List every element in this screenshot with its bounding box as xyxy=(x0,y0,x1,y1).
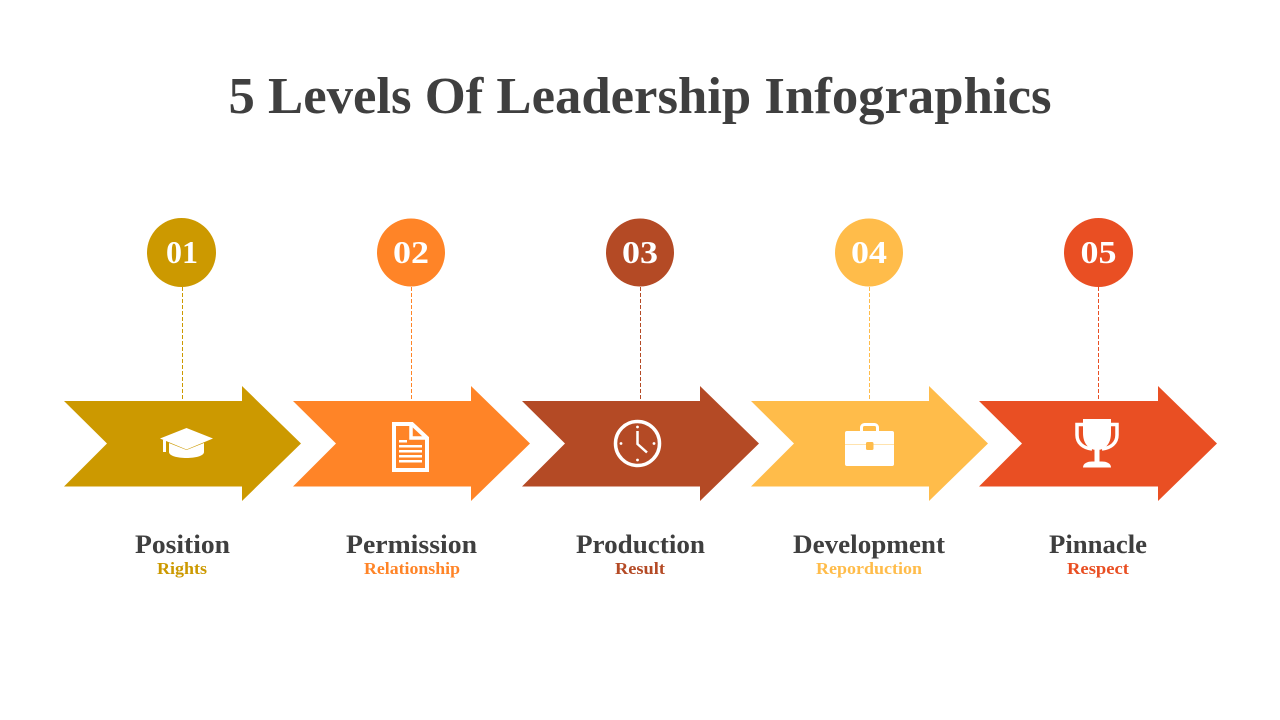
connector line 5 xyxy=(1098,287,1100,401)
sublabel: Result: Result xyxy=(615,559,665,578)
arrow 3 xyxy=(522,386,759,501)
icon: document xyxy=(394,423,427,470)
level 2: Permission xyxy=(293,218,530,578)
number badge 05 xyxy=(1064,218,1133,287)
arrow 2 xyxy=(293,386,530,501)
connector line 1 xyxy=(182,287,184,401)
title: 5 Levels Of Leadership Infographics xyxy=(228,68,1052,125)
number badge 04: 04 xyxy=(851,234,887,270)
arrow 1 xyxy=(64,386,301,501)
icon: briefcase xyxy=(845,424,894,466)
label: Permission: Permission xyxy=(346,530,478,559)
sublabel: Relationship: Relationship xyxy=(364,559,460,578)
number badge 01: 01 xyxy=(166,234,198,270)
number badge 03: 03 xyxy=(622,234,658,270)
label: Pinnacle: Pinnacle xyxy=(1049,530,1147,559)
number badge 02: 02 xyxy=(393,234,429,270)
level 4: Development xyxy=(751,218,988,578)
sublabel: Respect: Respect xyxy=(1067,559,1129,578)
label: Production: Production xyxy=(576,530,706,559)
arrow 5 xyxy=(979,386,1217,501)
icon: clock xyxy=(616,422,660,466)
label: Development: Development xyxy=(793,530,945,559)
number badge 05: 05 xyxy=(1080,234,1116,270)
icon: graduation cap xyxy=(160,428,213,458)
level 1: Position xyxy=(64,218,301,578)
number badge 04 xyxy=(835,218,903,286)
number badge 01 xyxy=(147,218,216,287)
connector line 3 xyxy=(640,287,642,401)
number badge 03 xyxy=(606,218,674,286)
connector line 4 xyxy=(868,287,870,401)
icon: trophy xyxy=(1077,419,1117,468)
level 3: Production xyxy=(522,218,759,578)
number badge 02 xyxy=(377,218,445,286)
sublabel: Rights: Rights xyxy=(157,559,207,578)
label: Position: Position xyxy=(135,530,231,559)
sublabel: Reporduction: Reporduction xyxy=(816,559,923,578)
arrow 4 xyxy=(751,386,988,501)
level 5: Pinnacle xyxy=(979,218,1217,578)
connector line 2 xyxy=(410,287,412,401)
